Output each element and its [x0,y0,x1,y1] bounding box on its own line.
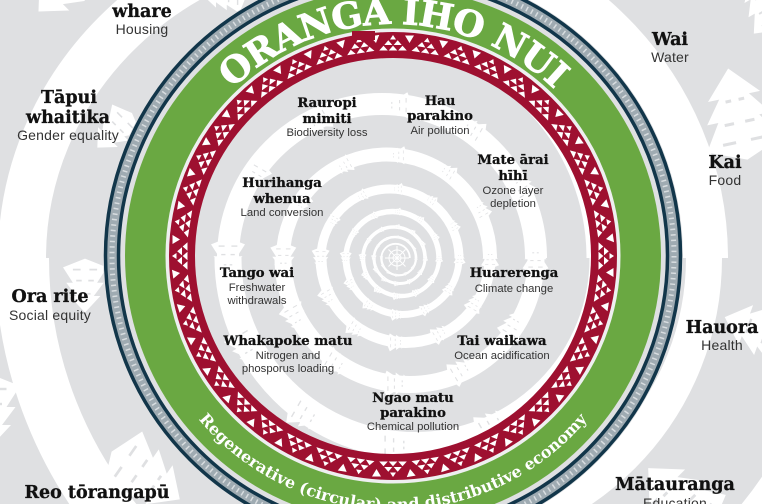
label: land conversion: whenua [252,192,311,207]
label: gender equality [17,88,119,143]
label: food: Kai [708,153,742,173]
label: political voice: Reo tōrangapū [24,483,170,503]
label: health: Health [701,337,743,353]
label: chemical pollution: Ngao matu [372,391,454,406]
label: freshwater withdrawals: Tango wai [220,266,294,281]
label: nitrogen and phosphorus loading: phosporus loading [242,363,334,375]
label: air pollution: Hau [425,94,456,109]
label: housing: whare [111,2,172,22]
label: gender equality: Gender equality [17,127,119,143]
label: water: Wai [651,30,688,50]
label: social equity [9,287,91,323]
red notch at top of ring [352,31,375,40]
label: gender equality: whaitika [25,108,110,128]
label: nitrogen and phosphorus loading: Nitrogen and [256,350,320,362]
label: climate change: Huarerenga [470,266,559,281]
label: chemical pollution: parakino [380,406,446,421]
spiral centre web [385,246,409,270]
label: food: Food [709,172,741,188]
label: ozone layer depletion: hīhī [498,169,528,184]
ring: beaded outer border [106,0,680,504]
label: ozone layer depletion: Ozone layer [483,185,544,197]
label: housing: Housing [116,21,168,37]
label: nitrogen and phosphorus loading: Whakapoke matu [223,334,353,349]
ring: white separator [168,30,618,482]
label: biodiversity loss: mimiti [302,112,352,127]
label: freshwater withdrawals: Freshwater [229,282,285,294]
label: climate change [470,266,559,295]
label: social equity: Social equity [9,307,91,323]
label: ozone layer depletion [477,153,549,210]
label: land conversion [241,176,323,219]
label: chemical pollution: Chemical pollution [367,421,459,433]
label: freshwater withdrawals [220,266,294,307]
label: climate change: Climate change [475,283,553,295]
label: nitrogen and phosphorus loading [223,334,353,375]
label: ozone layer depletion: depletion [490,198,536,210]
label: gender equality: Tāpui [41,88,97,108]
label: social equity: Ora rite [12,287,88,307]
label: water: Water [651,49,689,65]
label: biodiversity loss [286,96,368,139]
label: air pollution: Air pollution [410,125,470,137]
spiral arrows [211,92,548,462]
label: education [615,475,735,504]
label: freshwater withdrawals: withdrawals [226,295,287,307]
label: health [686,318,758,353]
label: ocean acidification: Tai waikawa [457,334,547,349]
label: biodiversity loss: Biodiversity loss [286,127,368,139]
label: water [651,30,689,65]
label: land conversion: Hurihanga [242,176,322,191]
label: air pollution: parakino [407,109,473,124]
label: education: Mātauranga [615,475,735,495]
label: ozone layer depletion: Mate ārai [477,153,549,168]
label: chemical pollution [367,391,459,433]
label: land conversion: Land conversion [241,207,323,219]
label: biodiversity loss: Rauropi [297,96,357,111]
label: health: Hauora [686,318,758,338]
label: food [708,153,742,188]
ring: green regenerative economy band [146,9,640,503]
label: air pollution [407,94,473,137]
label: housing [111,2,172,37]
label: ocean acidification [454,334,550,362]
label: ocean acidification: Ocean acidification [454,350,550,362]
ring: red kowhaiwhai band [171,34,615,478]
